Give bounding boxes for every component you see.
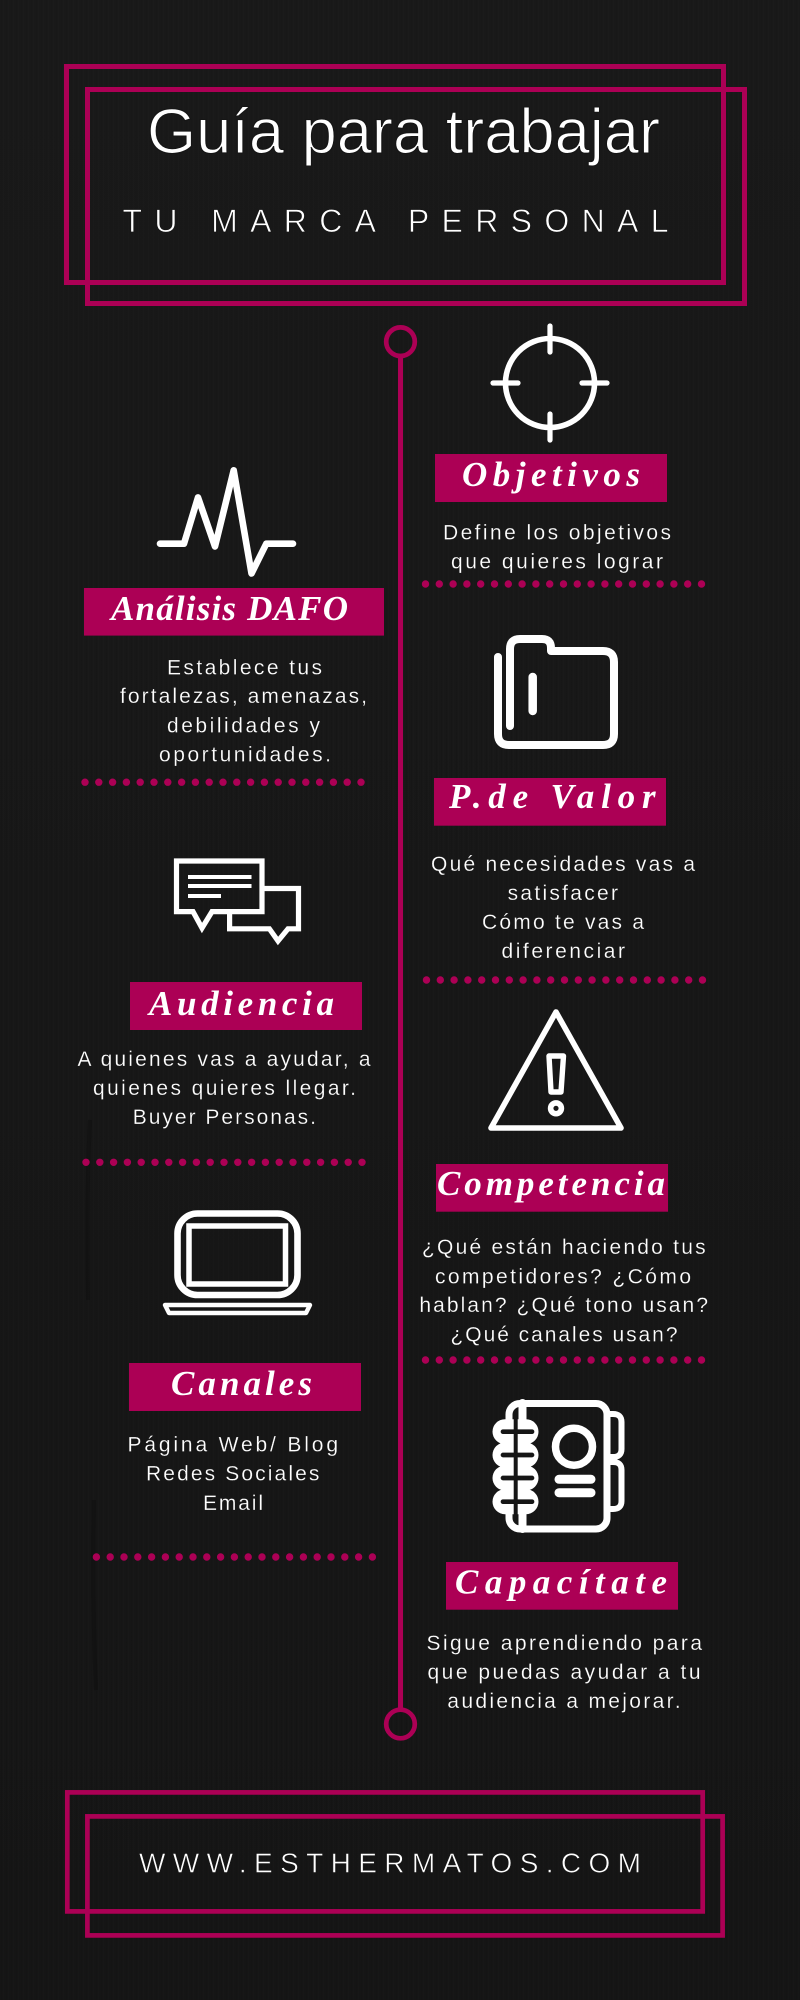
text: Canales list [128, 1434, 338, 1515]
panel: website footer frame [67, 1792, 723, 1935]
panel: Capacítate [426, 1403, 702, 1713]
text: Capacítate description: Sigue aprendiendo para [426, 1632, 702, 1655]
timeline: vertical line with end circles [386, 327, 415, 1738]
banner: Objetivos [435, 454, 667, 502]
text: Análisis DAFO description: debilidades y [167, 714, 320, 737]
banner: P.de Valor: P.de Valor [448, 777, 656, 816]
text: Competencia description: hablan? ¿Qué tono usan? [419, 1294, 708, 1317]
text: Objetivos description [443, 521, 671, 574]
banner: Objetivos: Objetivos [462, 455, 640, 494]
text: P.de Valor description: satisfacer [508, 882, 618, 905]
text: Canales list: Página Web/ Blog [128, 1434, 338, 1457]
banner: Análisis DAFO [84, 588, 384, 636]
banner: Audiencia: Audiencia [147, 984, 334, 1023]
text: P.de Valor description: Qué necesidades vas a [431, 853, 695, 876]
text: Audiencia description [78, 1048, 371, 1129]
text: Competencia description: ¿Qué canales usan? [450, 1323, 678, 1346]
banner: Canales: Canales [171, 1364, 312, 1403]
panel: Audiencia [78, 861, 371, 1129]
icon: laptop [165, 1214, 310, 1313]
icon: folder [498, 639, 614, 745]
panel: Análisis DAFO [84, 470, 384, 766]
icon: pulse line [160, 470, 293, 574]
panel: Objetivos [435, 326, 671, 574]
text: Capacítate description: que puedas ayudar a tu [428, 1661, 700, 1684]
text: Objetivos description: Define los objetivos [443, 521, 671, 544]
text: Capacítate description [426, 1632, 702, 1713]
banner: Competencia: Competencia [437, 1164, 665, 1203]
banner: Audiencia [130, 982, 362, 1030]
text: website URL: WWW.ESTHERMATOS.COM [139, 1848, 641, 1879]
panel: Competencia [419, 1012, 708, 1346]
panel: title frame [66, 66, 744, 304]
banner: Análisis DAFO: Análisis DAFO [109, 589, 348, 628]
text: Canales list: Redes Sociales [146, 1463, 319, 1486]
text: Análisis DAFO description [120, 656, 367, 766]
text: Audiencia description: A quienes vas a ayudar, a [78, 1048, 371, 1071]
text: Audiencia description: Buyer Personas. [133, 1106, 316, 1129]
text: P.de Valor description: diferenciar [502, 940, 625, 963]
text: P.de Valor description: Cómo te vas a [482, 911, 644, 934]
icon: speech bubbles [176, 861, 298, 941]
text: Objetivos description: que quieres lograr [451, 551, 663, 574]
text: Análisis DAFO description: Establece tus [167, 656, 322, 680]
panel: Canales [128, 1214, 361, 1515]
panel: P.de Valor [431, 639, 695, 963]
text: Competencia description: ¿Qué están haciendo tus [422, 1236, 706, 1259]
text: Competencia description [419, 1236, 708, 1346]
text: Análisis DAFO description: fortalezas, amenazas, [120, 685, 367, 708]
title: Guía para trabajar [147, 97, 660, 167]
text: Análisis DAFO description: oportunidades. [159, 744, 331, 766]
banner: Canales [129, 1363, 361, 1411]
text: P.de Valor description [431, 853, 695, 963]
text: Competencia description: competidores? ¿Cómo [435, 1265, 691, 1288]
text: Capacítate description: audiencia a mejorar. [447, 1690, 681, 1713]
icon: crosshair target [493, 326, 607, 440]
text: Audiencia description: quienes quieres llegar. [93, 1077, 356, 1100]
banner: Capacítate: Capacítate [455, 1562, 667, 1602]
subtitle: TU MARCA PERSONAL [122, 203, 668, 239]
icon: warning triangle [491, 1012, 621, 1128]
text: Canales list: Email [203, 1492, 263, 1515]
icon: spiral notebook [503, 1403, 622, 1529]
